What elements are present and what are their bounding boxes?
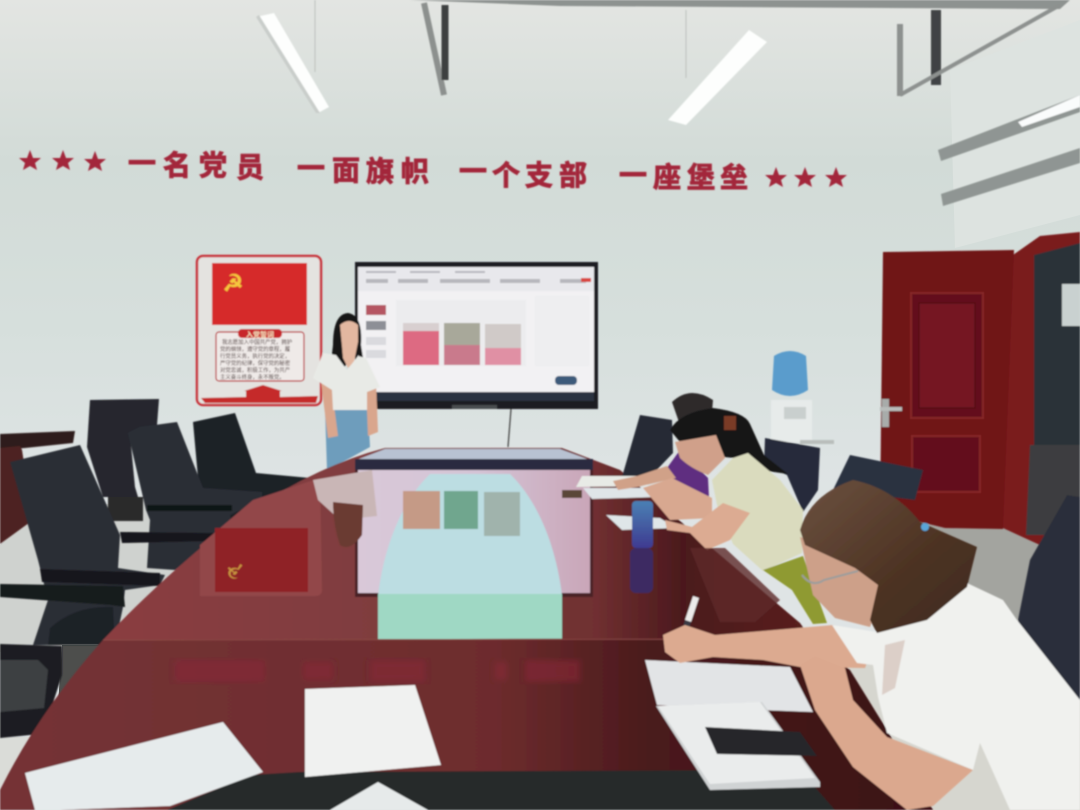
blouse — [313, 353, 380, 410]
door and door frame — [880, 232, 1080, 545]
slogan on wall: 座 — [653, 162, 681, 193]
slogan on wall: 垒 — [720, 162, 748, 193]
chair beside presenter — [193, 413, 310, 535]
slogan on wall: 面 — [332, 155, 360, 186]
reflection of presenter — [313, 470, 377, 547]
oath box: 行党员义务，执行党的决定， — [220, 352, 290, 360]
right wall pipes and tube light — [938, 95, 1080, 206]
far chair — [87, 399, 159, 521]
hair tie — [921, 523, 929, 531]
arm to paper — [663, 625, 875, 668]
reflection of display screen — [355, 459, 593, 597]
far right chairs — [622, 415, 1080, 700]
oath box — [216, 329, 304, 381]
mirrored slogan reflection — [175, 660, 580, 682]
slogan on wall: 帜 — [401, 156, 429, 187]
table top reflection of far wall — [356, 449, 590, 460]
water bottle and reflection — [630, 501, 653, 593]
glasses — [802, 571, 858, 583]
reflection of poster with flag: ☭ — [226, 559, 244, 581]
seated woman in back, purple top — [613, 393, 713, 520]
slogan on wall: 支 — [525, 160, 553, 191]
seated woman, lace blouse — [665, 408, 827, 624]
slogan on wall: 一 — [619, 160, 647, 191]
oath box: 对党忠诚，积极工作，为共产 — [220, 366, 290, 374]
conference table lower section — [0, 638, 933, 810]
ceiling light centre — [668, 10, 767, 125]
slogan on wall: 名 — [163, 150, 191, 181]
second chair — [128, 422, 262, 570]
wall display screen — [355, 262, 598, 447]
oath box: 党的纲领，遵守党的章程，履 — [220, 345, 291, 353]
slogan on wall: 旗 — [366, 156, 394, 187]
hair — [800, 480, 977, 633]
slogan on wall: 一 — [128, 148, 156, 179]
face — [800, 537, 885, 627]
dark inlay — [167, 770, 835, 810]
water cooler — [771, 351, 834, 444]
oath box: 主义奋斗终身，永不叛党。 — [220, 373, 285, 381]
oath box: 我志愿加入中国共产党，拥护 — [222, 338, 292, 346]
near left edge chair — [0, 644, 62, 738]
slogan on wall: 一 — [459, 156, 487, 187]
party poster — [197, 256, 321, 405]
shirt inner collar — [882, 640, 905, 695]
teal reflection arch — [378, 474, 562, 640]
red flag with emblem — [212, 263, 307, 325]
floor — [0, 468, 1080, 810]
jeans — [325, 408, 370, 470]
woman's reflection on table — [690, 548, 780, 622]
pen — [675, 596, 699, 658]
tiananmen silhouette — [201, 385, 318, 403]
ceiling pipes and brackets — [410, 0, 1070, 96]
slogan on wall: 堡 — [687, 162, 715, 193]
slogan on wall: 部 — [559, 160, 587, 191]
presenter standing — [313, 313, 380, 470]
hair — [331, 313, 364, 370]
slogan on wall: 一 — [297, 153, 325, 184]
slogan on wall: 党 — [199, 150, 227, 181]
arms — [321, 382, 338, 438]
slogan on wall: 员 — [236, 152, 264, 183]
oath box: 入党誓词 — [246, 330, 274, 339]
left side desk — [0, 431, 75, 544]
oath box: 严守党的纪律，保守党的秘密 — [220, 359, 291, 367]
slogan on wall: 个 — [492, 160, 520, 191]
notebook with phone — [656, 702, 820, 790]
face and neck — [340, 321, 358, 368]
front chair — [0, 445, 215, 645]
ceiling light left — [256, 0, 329, 113]
papers on far table — [562, 476, 676, 530]
near table papers — [25, 660, 813, 810]
white t-shirt — [832, 583, 1080, 810]
conference table upper section — [103, 448, 812, 640]
reflection of poster with flag — [200, 478, 322, 596]
red flag with emblem: ☭ — [223, 270, 243, 296]
slogan on wall — [19, 148, 847, 193]
back-left chairs — [0, 399, 310, 738]
lower arm and hand — [800, 656, 973, 810]
front woman writing — [663, 480, 1080, 810]
